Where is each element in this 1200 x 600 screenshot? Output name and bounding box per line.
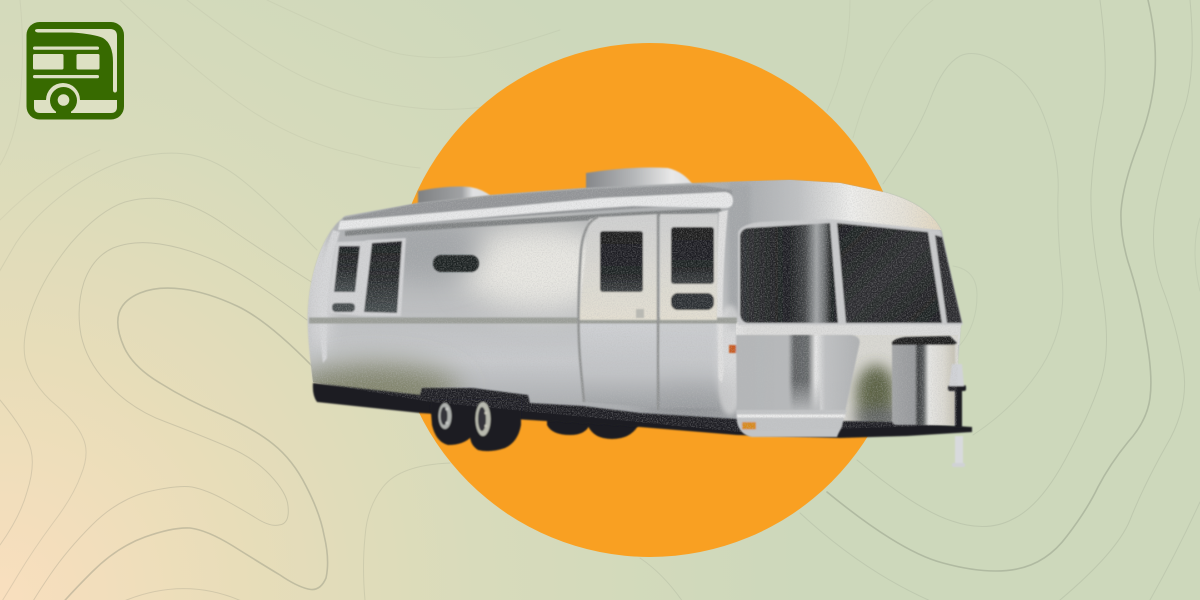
front windows (738, 219, 963, 325)
jack (948, 364, 966, 467)
icon: green trailer badge (26, 22, 124, 120)
trailer (290, 168, 972, 467)
far side wheels (547, 410, 638, 439)
body stripe (309, 318, 737, 324)
near wheels (430, 400, 521, 451)
hitch panel (729, 335, 860, 437)
metallic grain (305, 178, 965, 438)
roof band and awning (338, 185, 733, 236)
door (578, 214, 658, 410)
roof air conditioners (418, 168, 693, 205)
trailer body shell (290, 180, 965, 432)
propane tank (892, 336, 957, 425)
rear windows (328, 238, 479, 316)
chassis (313, 383, 972, 438)
door window (600, 231, 643, 292)
rear edge trim (320, 230, 340, 363)
orange circle (393, 43, 907, 557)
awning arm (716, 210, 728, 383)
cream panel with windows (660, 214, 718, 408)
